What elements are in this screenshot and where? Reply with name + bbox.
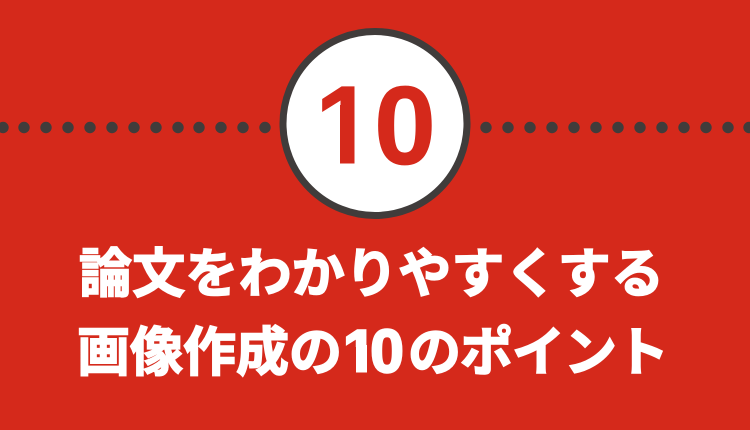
dotted line: right [480,122,750,133]
title line 1: 論文をわかりやすくする [79,245,664,304]
title line 2: のポイント [408,324,669,382]
number badge: 0 [374,64,436,188]
title line 2: 画像作成の [77,324,342,382]
title line 2 [78,324,663,378]
title line 2: 0 [370,318,404,385]
dotted line: left [0,122,271,133]
number badge: 1 [315,64,377,188]
number badge [283,32,467,216]
title line 2: 1 [343,318,376,385]
